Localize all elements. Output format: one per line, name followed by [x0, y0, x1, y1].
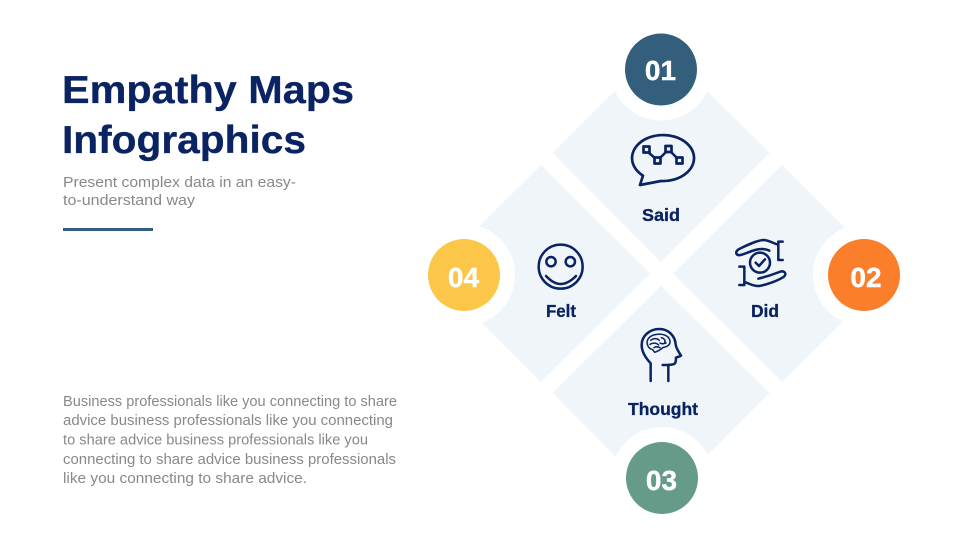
badge: 01: 01 [645, 55, 676, 86]
subtitle: Present complex data in an easy- [63, 174, 296, 191]
badge: 01 [610, 18, 712, 120]
badge: 02: 02 [850, 262, 882, 293]
diamond: did [673, 165, 891, 382]
panel: said [552, 45, 770, 262]
body paragraph: like you connecting to share advice. [63, 470, 307, 487]
icon: speech bubble [632, 135, 694, 185]
label: thought: Thought [628, 399, 698, 419]
diamond: said [552, 45, 770, 262]
body paragraph: connecting to share advice business professionals [63, 451, 396, 468]
body paragraph: advice business professionals like you connecting [63, 412, 393, 429]
badge: 02 [813, 224, 915, 326]
badge: 03 [611, 427, 713, 529]
icon: head with brain [642, 329, 681, 381]
accent underline [63, 228, 153, 231]
subtitle [63, 174, 296, 209]
body paragraph: to share advice business professionals like you [63, 432, 368, 448]
diamond: felt [432, 165, 650, 382]
icon: smiley face [539, 245, 583, 289]
badge: 03: 03 [646, 465, 677, 496]
subtitle: to-understand way [63, 192, 196, 209]
label: said: Said [642, 205, 680, 225]
panel: felt [432, 165, 650, 382]
panel: thought [552, 286, 770, 502]
icon: hands with check [736, 240, 785, 286]
label: did: Did [751, 301, 779, 321]
panel: did [673, 165, 891, 382]
badge: 04 [413, 224, 515, 326]
title: Empathy Maps [62, 69, 354, 112]
badge: 04: 04 [448, 262, 479, 293]
body paragraph [63, 393, 397, 487]
diamond: thought [552, 286, 770, 502]
title [62, 69, 354, 162]
title: Infographics [62, 119, 306, 162]
body paragraph: Business professionals like you connecting to share [63, 393, 397, 410]
label: felt: Felt [546, 301, 576, 321]
